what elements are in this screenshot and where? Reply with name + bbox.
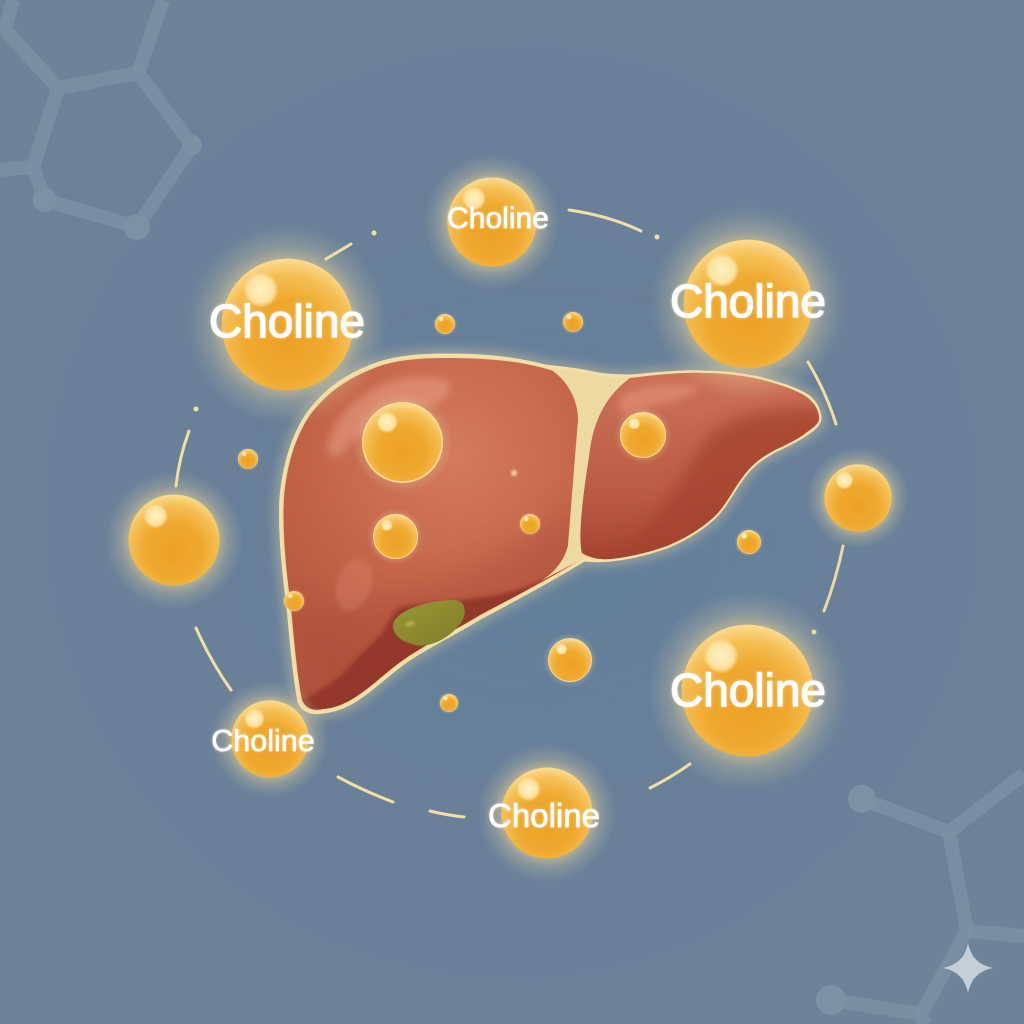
droplet: upper left choline <box>188 225 387 424</box>
left lobe dark underside <box>302 568 566 710</box>
droplet: lower left choline: Choline <box>211 724 315 758</box>
molecule pattern: bottom right <box>816 774 1024 1024</box>
droplet: top choline <box>424 154 560 290</box>
droplet: lower right choline <box>648 591 847 790</box>
droplet: upper left choline: Choline <box>209 295 365 347</box>
liver shadow glow <box>230 300 870 780</box>
liver <box>270 344 830 722</box>
right lobe highlight <box>617 385 700 415</box>
droplet: lower left choline <box>211 680 328 798</box>
droplet: left unlabeled <box>105 471 243 609</box>
left lobe sparkle <box>511 470 517 476</box>
left lobe lower spot <box>336 560 372 611</box>
droplet: lower right choline: Choline <box>670 664 826 716</box>
icon: sparkle <box>943 943 993 993</box>
droplet: upper right choline <box>650 206 846 402</box>
molecule pattern: top left <box>0 0 202 240</box>
liver ligament and silhouette <box>280 355 820 713</box>
liver right lobe <box>580 372 820 560</box>
dashed orbit ring <box>176 210 843 817</box>
left lobe mid shade <box>297 515 575 696</box>
gallbladder <box>393 600 465 646</box>
droplet: right unlabeled <box>807 447 909 549</box>
droplet: top choline: Choline <box>447 202 549 235</box>
right lobe dark underside <box>583 401 820 560</box>
liver left lobe <box>284 358 578 710</box>
liver cream glow <box>280 355 820 713</box>
gallbladder highlight <box>404 620 416 628</box>
droplet: upper right choline: Choline <box>670 275 826 327</box>
small droplets <box>236 310 764 714</box>
left lobe highlight <box>327 377 450 457</box>
droplet: bottom choline: Choline <box>488 797 600 834</box>
droplet: bottom choline <box>478 744 616 882</box>
